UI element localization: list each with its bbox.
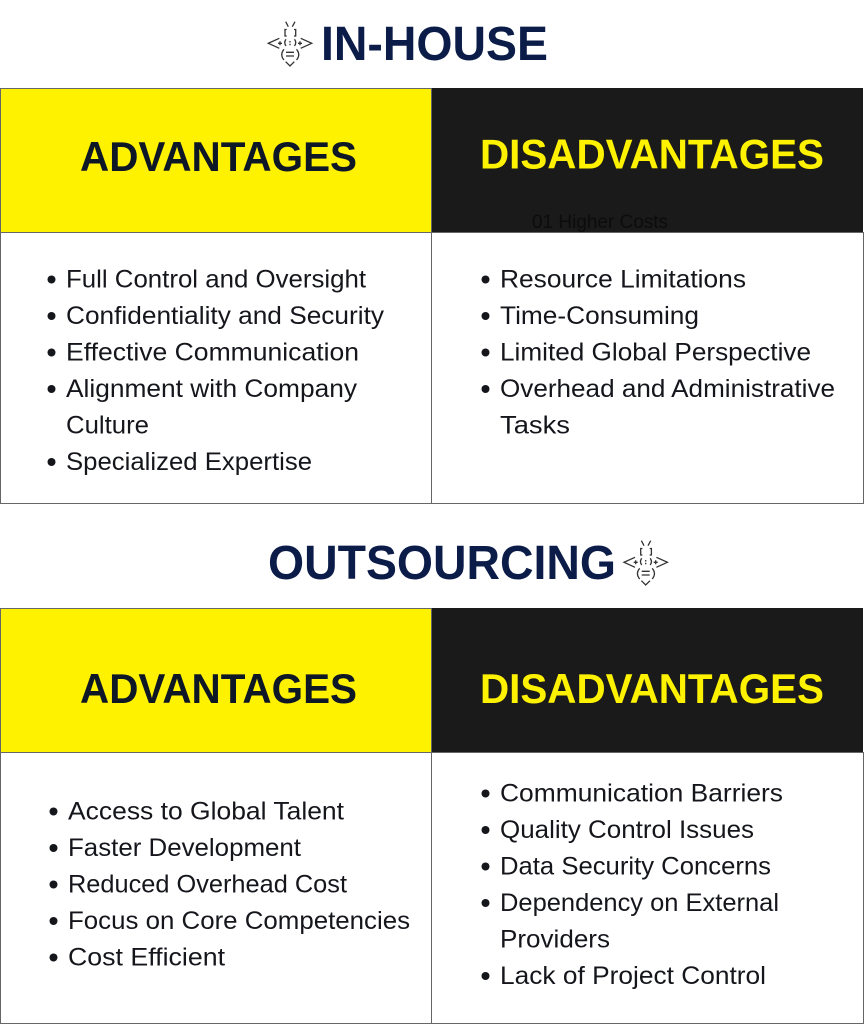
panel: in-house disadvantages header: 01 Higher Costs: [532, 212, 668, 233]
panel: in-house disadvantages list: Resource Limitations: [500, 266, 746, 294]
panel: outsourcing advantages list: Cost Efficient: [68, 944, 225, 972]
table: in-house comparison: [0, 88, 864, 504]
panel: outsourcing disadvantages list: [432, 752, 864, 1024]
panel: outsourcing disadvantages list: Dependency on External: [500, 889, 779, 917]
icon: bee: [624, 541, 667, 585]
panel: in-house advantages list: Culture: [66, 412, 149, 440]
panel: outsourcing disadvantages list: Lack of Project Control: [500, 962, 766, 990]
panel: in-house advantages list: Specialized Expertise: [66, 448, 312, 476]
panel: in-house advantages header: ADVANTAGES: [80, 133, 357, 180]
heading: in-house with bee icon: [268, 18, 548, 71]
icon: bee: [268, 22, 312, 66]
panel: in-house disadvantages list: [432, 232, 864, 504]
heading text: OUTSOURCING: OUTSOURCING: [268, 537, 616, 590]
panel: outsourcing advantages header: [0, 608, 432, 752]
table: outsourcing comparison: [0, 608, 864, 1024]
panel: outsourcing disadvantages list: Communication Barriers: [500, 780, 783, 808]
panel: in-house disadvantages header: DISADVANTAGES: [480, 130, 824, 178]
panel: in-house disadvantages list: Time-Consuming: [500, 302, 699, 330]
panel: in-house disadvantages list: Tasks: [500, 412, 570, 440]
panel: outsourcing advantages header: ADVANTAGES: [80, 665, 357, 712]
panel: outsourcing advantages list: Faster Development: [68, 834, 301, 862]
panel: outsourcing disadvantages list: Providers: [500, 926, 610, 954]
heading text: IN-HOUSE: IN-HOUSE: [321, 18, 548, 71]
panel: in-house advantages list: Effective Communication: [66, 338, 359, 366]
panel: outsourcing disadvantages header: DISADVANTAGES: [480, 665, 824, 712]
heading: outsourcing with bee icon: [268, 537, 667, 590]
panel: outsourcing advantages list: Access to Global Talent: [68, 798, 344, 826]
panel: outsourcing disadvantages list: Quality Control Issues: [500, 816, 754, 844]
panel: in-house disadvantages list: Limited Global Perspective: [500, 338, 811, 366]
panel: in-house advantages header: [0, 88, 432, 232]
panel: in-house advantages list: Full Control and Oversight: [66, 266, 366, 294]
panel: outsourcing disadvantages header: [432, 608, 863, 752]
panel: in-house disadvantages header: [432, 88, 863, 233]
panel: outsourcing disadvantages list: Data Security Concerns: [500, 852, 771, 880]
panel: in-house advantages list: Confidentiality and Security: [66, 302, 385, 330]
panel: in-house disadvantages list: Overhead and Administrative: [500, 375, 835, 403]
panel: in-house advantages list: Alignment with Company: [66, 375, 358, 403]
panel: outsourcing advantages list: Reduced Overhead Cost: [68, 870, 347, 898]
panel: outsourcing advantages list: [0, 752, 432, 1024]
panel: in-house advantages list: [0, 232, 432, 504]
panel: outsourcing advantages list: Focus on Core Competencies: [68, 907, 410, 935]
